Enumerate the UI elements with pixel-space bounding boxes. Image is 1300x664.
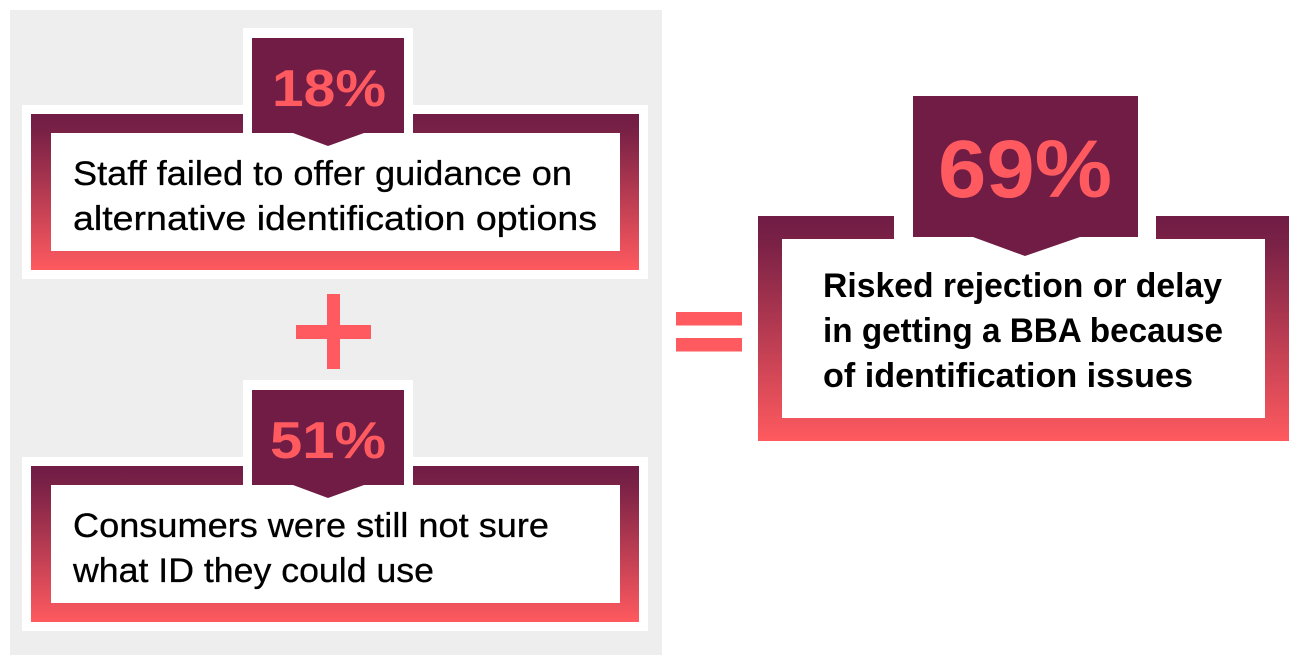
panel: 51% unsure of ID <box>22 380 648 631</box>
text: risked rejection <box>823 267 1223 395</box>
text: risked rejection: Risked rejection or delay <box>823 267 1222 305</box>
badge: 69%: 69% <box>938 124 1112 215</box>
badge: 69% <box>913 96 1138 256</box>
badge: 18%: 18% <box>272 60 386 118</box>
text: staff guidance <box>73 155 597 238</box>
panel: 69% result <box>758 96 1289 441</box>
badge: 51% <box>252 390 404 498</box>
text: unsure of ID: what ID they could use <box>72 552 434 590</box>
text: unsure of ID <box>72 507 549 590</box>
icon: plus sign <box>296 294 371 369</box>
text: staff guidance: Staff failed to offer guidance on <box>73 155 572 193</box>
text: risked rejection: in getting a BBA because <box>823 312 1223 350</box>
text: unsure of ID: Consumers were still not sure <box>73 507 549 545</box>
panel: contributing factors background <box>10 10 662 655</box>
badge: 18% <box>252 38 404 146</box>
text: staff guidance: alternative identification options <box>73 200 597 238</box>
badge: 51%: 51% <box>270 412 386 470</box>
panel: 18% staff guidance <box>22 28 648 279</box>
icon: equals sign <box>676 312 742 352</box>
text: risked rejection: of identification issues <box>823 357 1193 395</box>
